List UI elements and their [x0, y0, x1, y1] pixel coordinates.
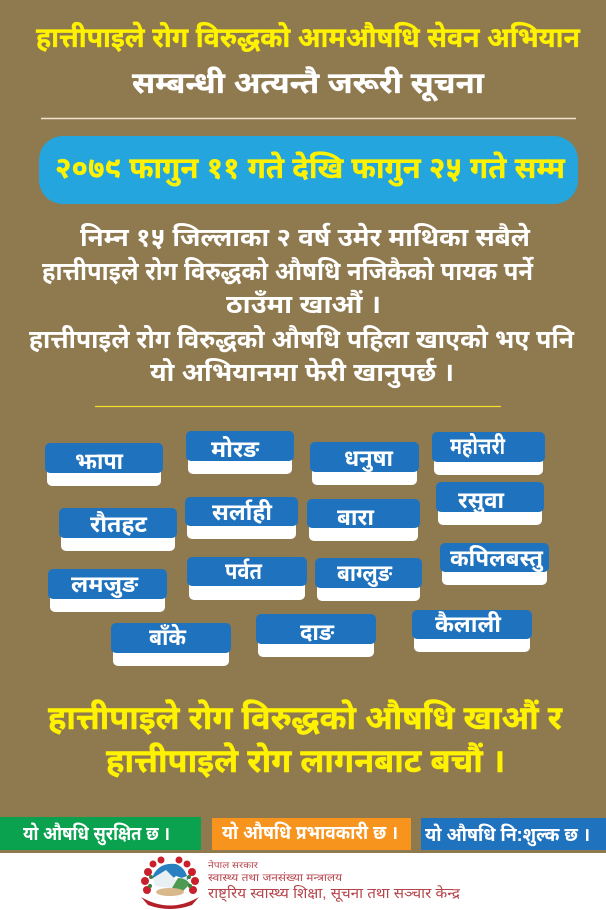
district: Sarlahi — [185, 497, 298, 539]
district: Mahottari — [432, 432, 545, 475]
call to action: हात्तीपाइले रोग लागनबाट बचौं । — [106, 741, 505, 779]
district: Mahottari: महोत्तरी — [450, 433, 506, 459]
message bar: free — [421, 818, 606, 850]
district: Dhanusha: धनुषा — [344, 445, 394, 472]
date banner — [39, 136, 578, 204]
instruction text — [29, 222, 575, 388]
district: Bara: बारा — [337, 504, 375, 530]
instruction text: ठाउँमा खाऔं । — [226, 289, 381, 319]
district: Kailali — [412, 610, 532, 652]
title: सम्बन्धी अत्यन्तै जरूरी सूचना — [132, 65, 485, 102]
call to action: हात्तीपाइले रोग विरुद्धको औषधि खाऔं र — [48, 698, 563, 736]
district: Dang: दाङ — [300, 619, 335, 645]
district: Rasuwa — [436, 482, 544, 525]
message bar: effective: यो औषधि प्रभावकारी छ । — [222, 822, 398, 844]
district: Sarlahi: सर्लाही — [212, 499, 273, 525]
title: हात्तीपाइले रोग विरुद्धको आमऔषधि सेवन अभियान — [36, 20, 581, 53]
instruction text: हात्तीपाइले रोग विरुद्धको औषधि नजिकैको पायक पर्ने — [42, 256, 535, 286]
district: Baglung — [315, 558, 422, 601]
organisation name: स्वास्थ्य तथा जनसंख्या मन्त्रालय — [208, 872, 342, 884]
message bar: free: यो औषधि नि:शुल्क छ । — [425, 824, 590, 847]
district: Rautahat — [59, 508, 177, 551]
district: Rasuwa: रसुवा — [458, 487, 505, 514]
district: Banke — [111, 623, 231, 666]
call to action — [48, 698, 563, 779]
title — [36, 20, 581, 102]
message bar: safe: यो औषधि सुरक्षित छ । — [23, 823, 170, 846]
organisation name: राष्ट्रिय स्वास्थ्य शिक्षा, सूचना तथा सञ्चार केन्द्र — [208, 884, 461, 903]
district: Lamjung: लमजुङ — [71, 571, 139, 598]
footer — [0, 853, 606, 910]
organisation name — [208, 859, 461, 903]
district cards — [45, 431, 549, 666]
district: Baglung: बाग्लुङ — [337, 560, 393, 587]
district: Bara — [307, 499, 420, 541]
organisation name: नेपाल सरकार — [208, 859, 258, 870]
district: Kapilbastu — [440, 543, 549, 585]
district: Rautahat: रौतहट — [90, 511, 148, 537]
district: Jhapa — [45, 443, 163, 486]
district: Kailali: कैलाली — [435, 611, 502, 637]
district: Morang — [186, 431, 294, 474]
district: Parbat — [187, 557, 307, 600]
district: Lamjung — [48, 569, 167, 612]
district: Parbat: पर्वत — [225, 558, 263, 584]
district: Kapilbastu: कपिलबस्तु — [450, 545, 544, 572]
district: Banke: बाँके — [149, 624, 187, 650]
district: Morang: मोरङ — [211, 436, 260, 462]
instruction text: यो अभियानमा फेरी खानुपर्छ । — [150, 357, 454, 388]
district: Dhanusha — [310, 442, 419, 485]
instruction text: निम्न १५ जिल्लाका २ वर्ष उमेर माथिका सबैले — [80, 222, 531, 252]
district: Jhapa: झापा — [75, 448, 124, 474]
message bar: safe — [0, 817, 201, 850]
message bar: effective — [212, 818, 411, 850]
instruction text: हात्तीपाइले रोग विरुद्धको औषधि पहिला खाएको भए पनि — [29, 324, 575, 354]
date banner: २०७९ फागुन ११ गते देखि फागुन २५ गते सम्म — [55, 150, 565, 187]
district: Dang — [256, 614, 376, 657]
icon: Nepal emblem — [141, 856, 199, 909]
